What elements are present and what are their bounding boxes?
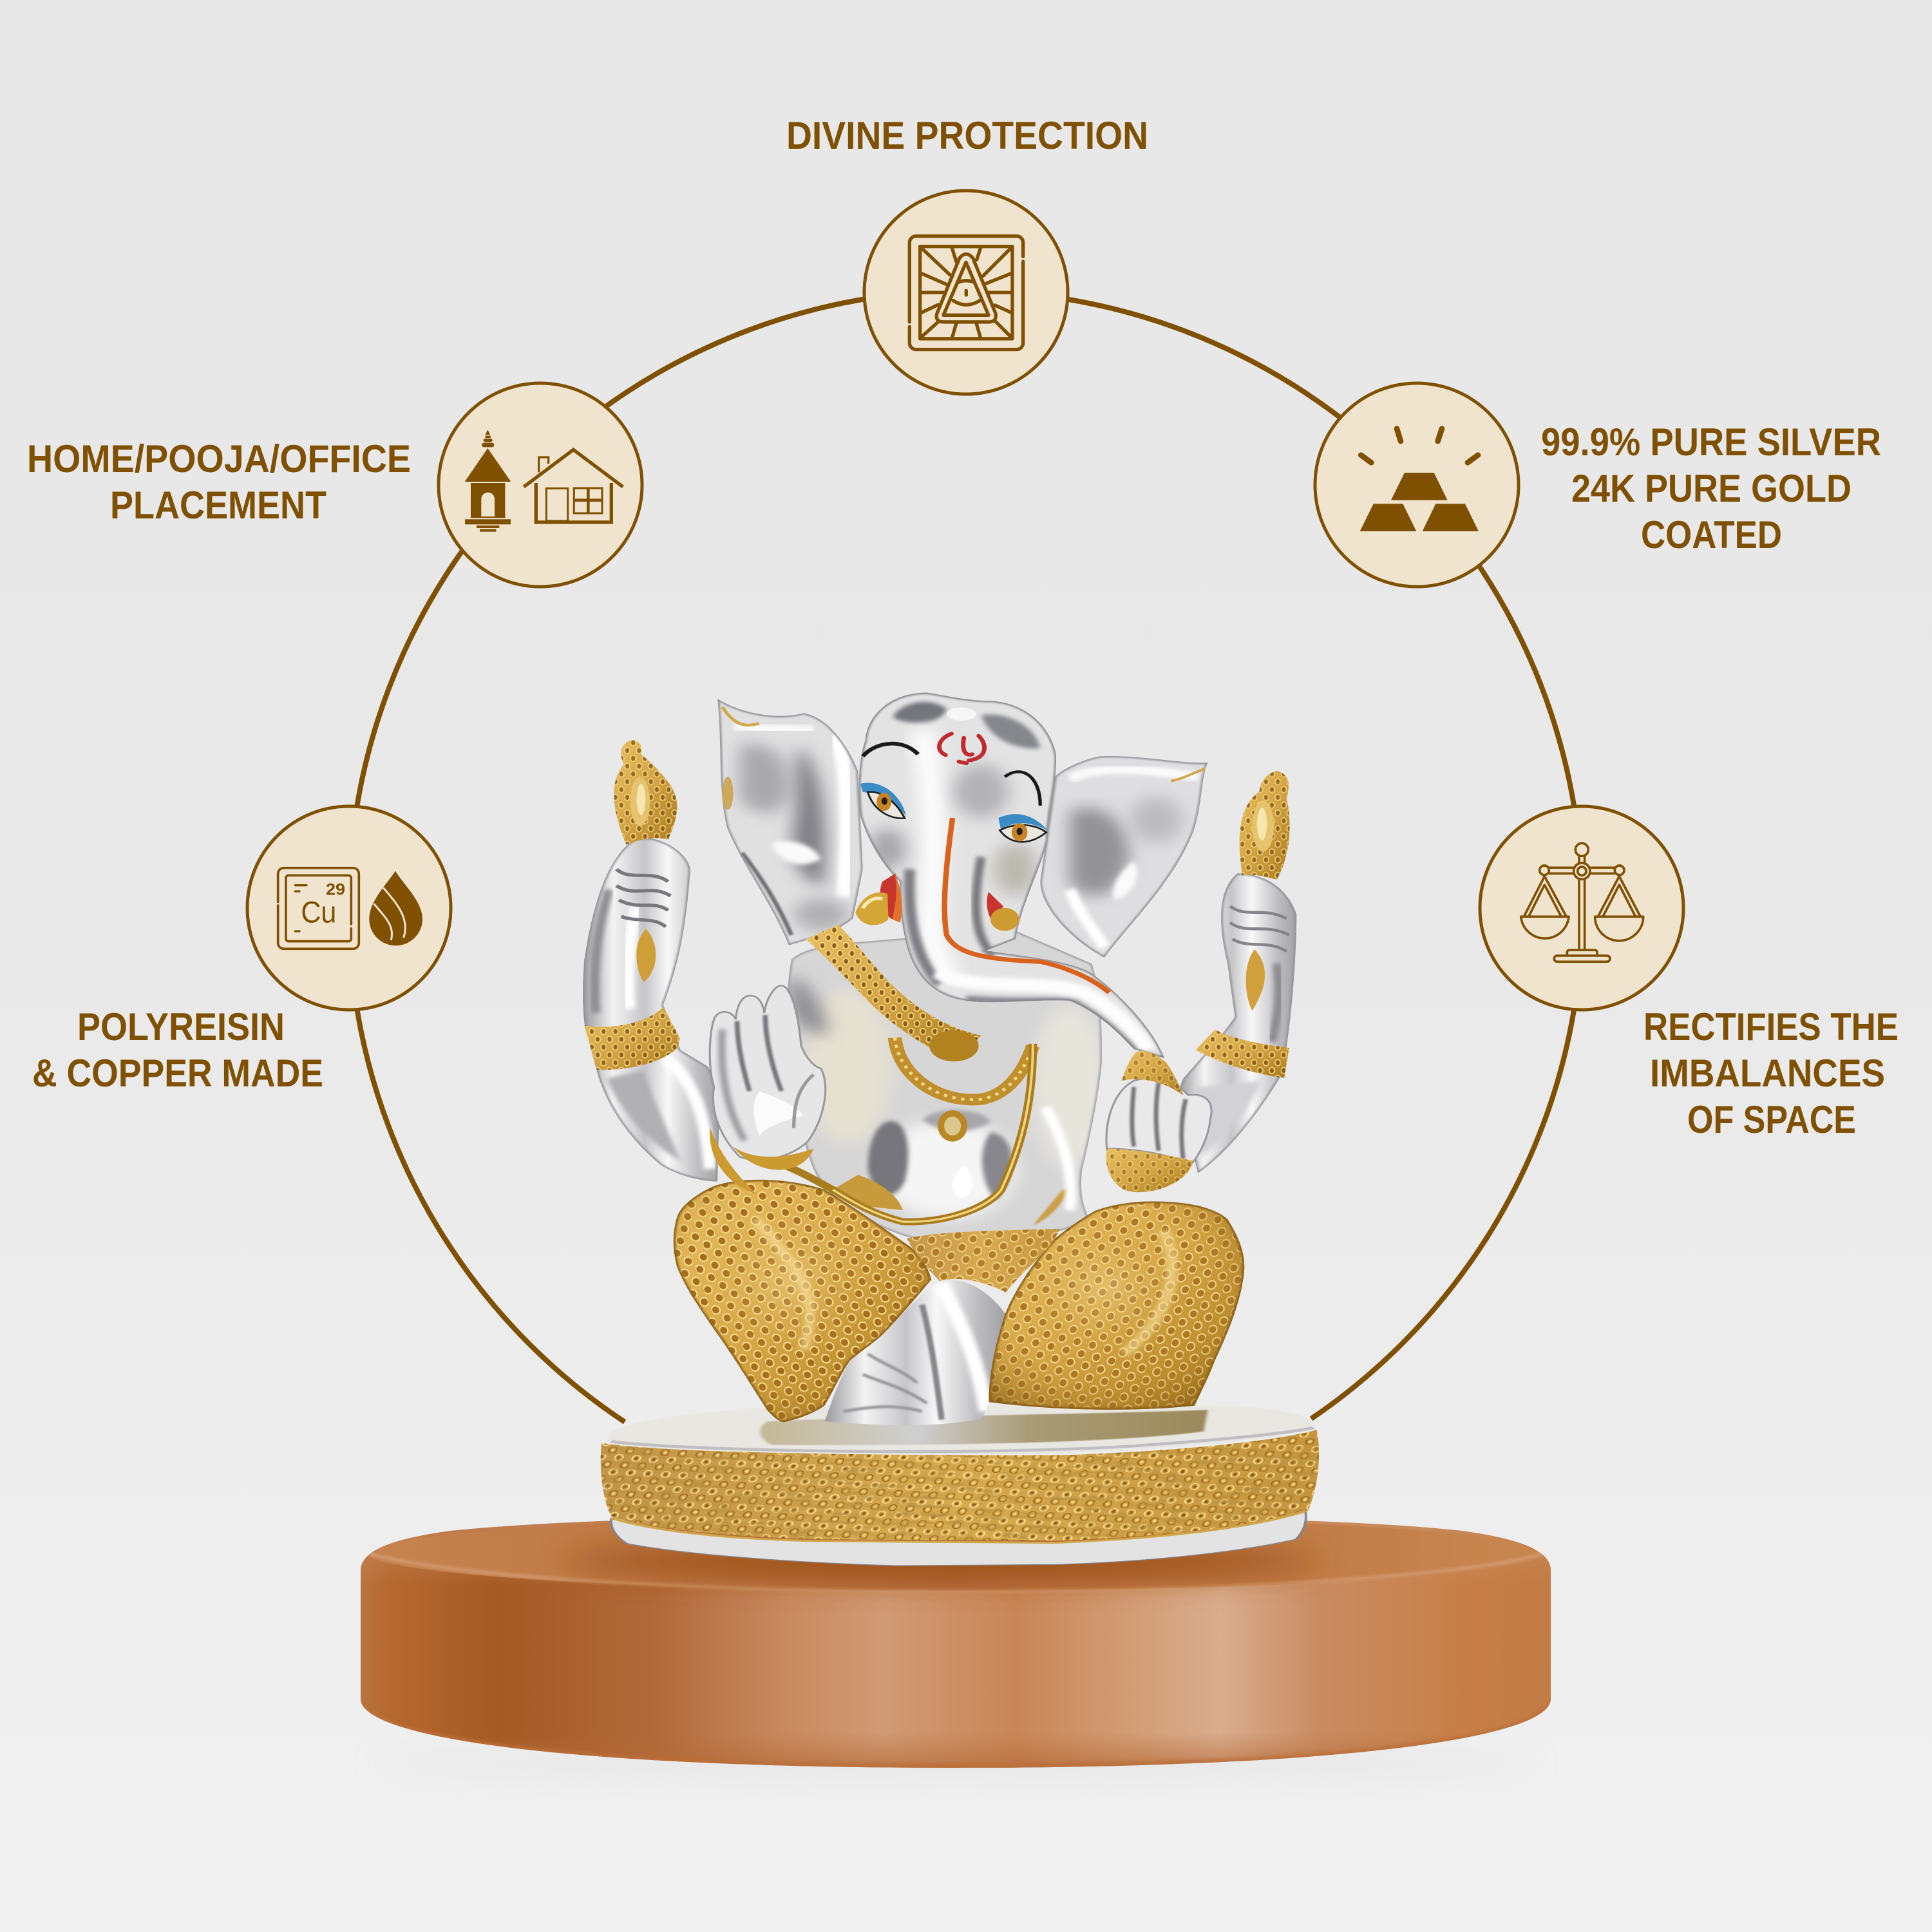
- gold trim line: [611, 1511, 1305, 1543]
- head and trunk: [855, 693, 1164, 1058]
- necklace: [895, 1030, 1033, 1142]
- waist gold dots: [907, 1229, 1060, 1293]
- sacred thread: [784, 1044, 1033, 1222]
- heading: placement: HOME/POOJA/OFFICE: [27, 437, 411, 480]
- torso: [787, 931, 1107, 1242]
- trunk orange stripe: [945, 818, 1109, 992]
- badge: copper material: [247, 806, 451, 1010]
- feature: divine protection: [786, 114, 1148, 394]
- heading: copper material: POLYREISIN: [77, 1005, 285, 1048]
- mouth and tusks: [880, 873, 896, 920]
- heading: copper material: [32, 1005, 323, 1095]
- right fist: [1106, 1078, 1211, 1165]
- eyebrows: [863, 744, 918, 756]
- right raised arm: [1179, 873, 1296, 1173]
- right ear: [1040, 756, 1208, 958]
- right eye: [998, 814, 1048, 842]
- heading: rectifies space: IMBALANCES: [1650, 1052, 1885, 1095]
- forehead mark: [939, 734, 985, 763]
- pedestal body: [354, 1513, 1558, 1771]
- left open palm: [710, 985, 826, 1160]
- icon: temple and house: [465, 430, 623, 532]
- icon: copper element and drop: [278, 868, 422, 949]
- ring connecting features: [348, 290, 1582, 1422]
- statue: Ganesha figure: [583, 693, 1296, 1425]
- silver top of base: [607, 1406, 1314, 1457]
- heading: pure silver and gold: 24K PURE GOLD: [1571, 467, 1852, 510]
- badge: rectifies space: [1480, 806, 1683, 1010]
- left palm gold trim: [710, 1128, 813, 1195]
- heading: placement: [27, 437, 411, 527]
- feature: rectifies space: [1480, 806, 1899, 1141]
- statue base disc: [601, 1406, 1319, 1566]
- feature: copper material: [32, 806, 451, 1095]
- badge: divine protection: [864, 191, 1068, 394]
- right bracelet: [1195, 1030, 1289, 1078]
- icon: all-seeing eye: [909, 236, 1023, 350]
- badge: placement: [439, 383, 642, 587]
- feature: placement: [27, 383, 642, 587]
- right fist gold parts: [1106, 1051, 1193, 1192]
- right leg: [989, 1202, 1244, 1410]
- left raised arm: [583, 838, 720, 1181]
- heading: divine protection: DIVINE PROTECTION: [786, 114, 1148, 157]
- badge: pure silver and gold: [1315, 383, 1519, 587]
- icon: gold bars: [1360, 429, 1479, 531]
- icon: balance scale: [1521, 843, 1643, 961]
- heading: pure silver and gold: COATED: [1641, 513, 1782, 556]
- heading: pure silver and gold: [1541, 421, 1881, 556]
- left bracelet: [584, 1007, 679, 1070]
- heading: rectifies space: [1643, 1005, 1899, 1141]
- left leg: [674, 1180, 931, 1422]
- gold band of base: [601, 1430, 1319, 1540]
- heading: rectifies space: RECTIFIES THE: [1643, 1005, 1899, 1048]
- icon: copper element and drop: 29: [326, 880, 345, 898]
- right gold club: [1240, 771, 1290, 880]
- left eye: [860, 782, 906, 819]
- left ear: [717, 699, 863, 945]
- icon: copper element and drop: Cu: [301, 896, 336, 930]
- heading: pure silver and gold: 99.9% PURE SILVER: [1541, 421, 1881, 464]
- heading: copper material: & COPPER MADE: [32, 1052, 323, 1095]
- pedestal floor shadow: [376, 1749, 1535, 1777]
- heading: rectifies space: OF SPACE: [1687, 1098, 1856, 1141]
- pedestal: [354, 1513, 1558, 1777]
- belly gold wedge: [833, 1175, 903, 1210]
- gold collar: [806, 925, 981, 1060]
- feature: pure silver and gold: [1315, 383, 1881, 587]
- heading: placement: PLACEMENT: [110, 484, 327, 527]
- silver bottom of base: [611, 1511, 1306, 1566]
- left gold club: [614, 740, 677, 844]
- silver foot: [825, 1280, 1005, 1425]
